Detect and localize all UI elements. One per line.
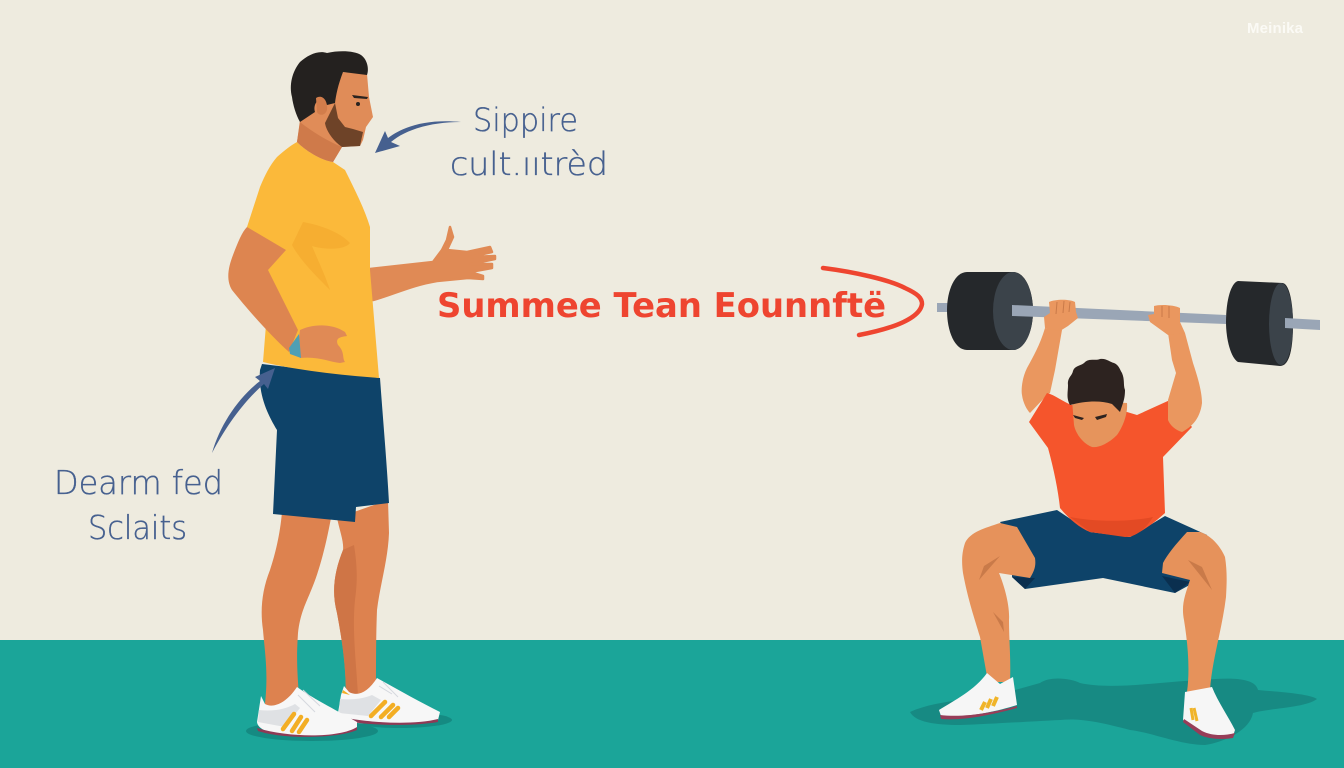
teal floor xyxy=(0,640,1344,768)
beard xyxy=(325,103,363,147)
raised right arm xyxy=(1168,333,1202,432)
finger lines xyxy=(1056,301,1169,318)
watermark: Meinika xyxy=(1247,20,1304,37)
raised left arm xyxy=(1022,328,1062,413)
back leg xyxy=(334,500,389,700)
shirt folds xyxy=(292,222,350,290)
right shoe xyxy=(1183,687,1235,739)
wristwatch xyxy=(289,334,301,358)
hands on bar xyxy=(1044,300,1185,335)
callout top: text xyxy=(450,101,608,183)
red curve around headline xyxy=(823,268,922,335)
face xyxy=(1072,400,1127,447)
floor shadow xyxy=(910,678,1317,745)
right plate xyxy=(1226,281,1293,366)
right stub xyxy=(1285,318,1320,330)
callout bottom: text xyxy=(54,463,223,547)
red headline: Summee Tean Eounnftë xyxy=(437,286,886,326)
yellow shirt xyxy=(247,142,379,378)
bar left stub xyxy=(937,303,949,312)
shorts hems xyxy=(1012,576,1190,593)
left shoe xyxy=(939,673,1017,719)
eye and brow xyxy=(352,95,368,106)
head xyxy=(1068,359,1127,447)
front leg xyxy=(262,512,331,712)
callout top: text: cult.ııtrèd xyxy=(450,145,608,183)
front shoe xyxy=(257,687,357,737)
shorts xyxy=(260,364,389,522)
navy shorts xyxy=(1000,510,1207,593)
leg muscle shading xyxy=(979,556,1212,632)
arrow: bottom callout to shorts xyxy=(212,368,275,453)
orange shirt xyxy=(1029,393,1192,537)
far arm with open hand xyxy=(370,227,495,300)
left plate xyxy=(947,272,1033,350)
callout bottom: text: Sclaits xyxy=(88,508,187,547)
thighs and calves xyxy=(962,523,1227,692)
back shoe xyxy=(338,678,440,725)
brows xyxy=(1073,414,1107,420)
arrow: top callout to coach xyxy=(375,121,461,153)
neck and face xyxy=(297,72,373,162)
shirt fold xyxy=(1070,517,1153,537)
barbell xyxy=(937,272,1320,366)
near arm xyxy=(228,227,298,352)
foot shadows xyxy=(246,712,452,741)
ear xyxy=(316,97,327,115)
hair xyxy=(291,51,368,122)
hair xyxy=(1068,359,1125,412)
figure: squatting lifter xyxy=(910,272,1320,745)
hand on hip xyxy=(298,325,347,363)
callout bottom: text: Dearm fed xyxy=(54,463,223,502)
callout top: text: Sippire xyxy=(473,101,578,139)
main bar xyxy=(1012,305,1226,324)
figure: standing coach xyxy=(228,51,495,741)
